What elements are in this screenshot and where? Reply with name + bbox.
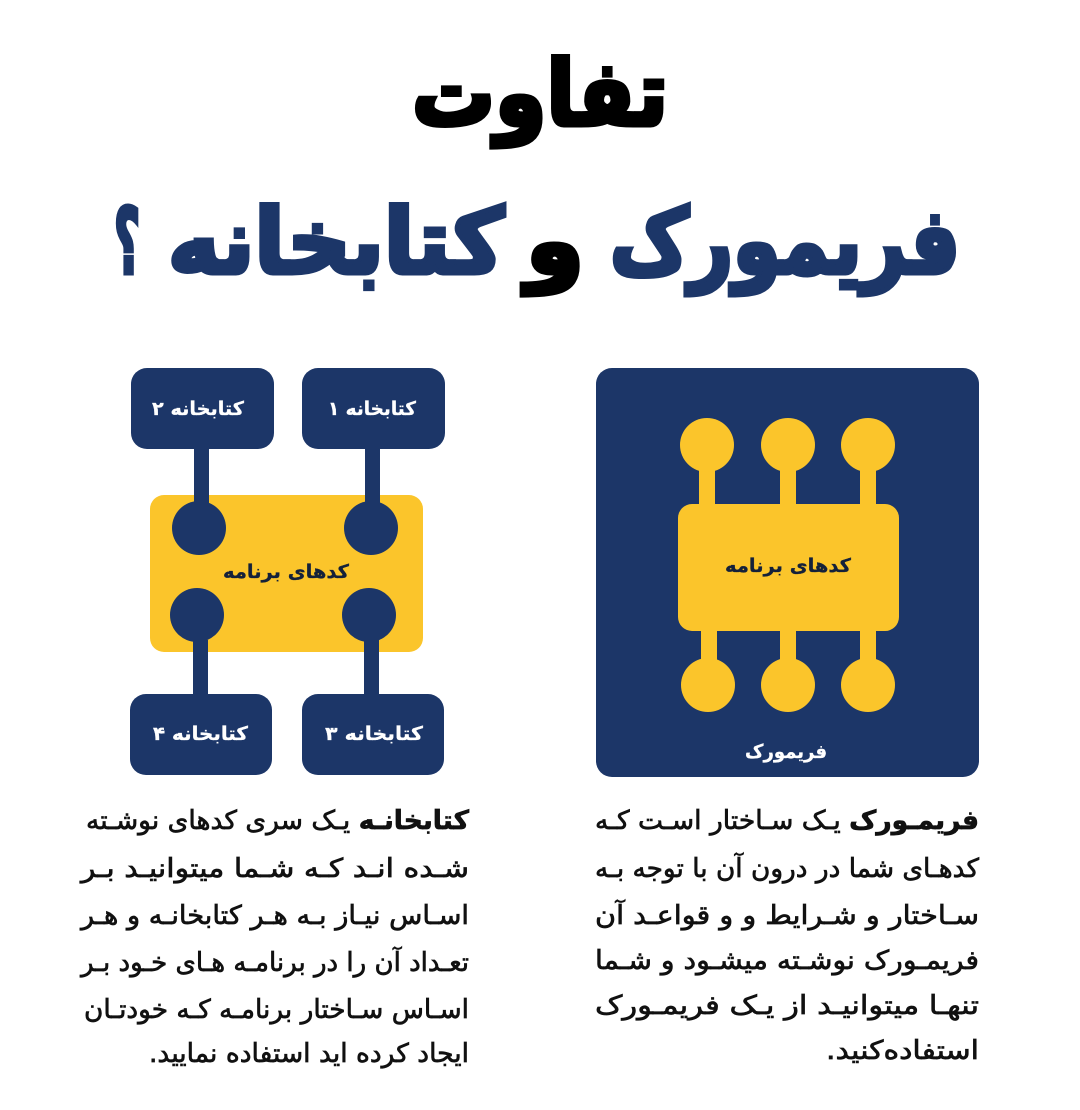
library 1 box: کتابخانه ۱ (328, 398, 417, 420)
title line 2: ؟ (114, 190, 140, 295)
panel: library diagram (130, 368, 445, 775)
text block: framework description: تنهـا میتوانیـد از یـک فریمـورک (595, 991, 979, 1021)
heading word: framework: فریمورک (610, 190, 960, 295)
text block: library description: اسـاس نیـاز بـه هـر کتابخانـه و هـر (79, 901, 469, 931)
connectors and nodes (680, 418, 895, 712)
program code box (150, 495, 423, 652)
text block: framework description: استفاده‌کنید. (826, 1036, 979, 1066)
text block: framework description: کدهـای شما در درون آن با توجه بـه (595, 852, 980, 884)
title line 2 (114, 190, 960, 296)
heading word: library: کتابخانه (168, 190, 505, 295)
text block: library description (79, 806, 470, 1069)
text block: library description: اسـاس سـاختار برنامـه کـه خودتـان (84, 995, 469, 1025)
text block: library description: تعـداد آن را در برنامـه هـای خـود بـر (79, 946, 469, 978)
label: framework: فریمورک (745, 741, 827, 763)
label: program code: کدهای برنامه (725, 555, 852, 577)
text block: library description: ایجاد کرده اید استفاده نمایید. (149, 1039, 469, 1069)
text block: framework description: فریمـورک یـک سـاختار اسـت کـه (595, 806, 979, 836)
library 4 box: کتابخانه ۴ (153, 723, 249, 745)
library 3 box: کتابخانه ۳ (325, 723, 424, 745)
connectors (170, 440, 398, 700)
heading word: and: و (522, 190, 584, 296)
library 1 box (302, 368, 445, 449)
text block: framework description: فریمـورک نوشـته میشـود و شـما (595, 946, 979, 976)
library 4 box (130, 694, 272, 775)
text block: framework description (595, 806, 980, 1066)
library 3 box (302, 694, 444, 775)
label: program code: کدهای برنامه (223, 561, 350, 583)
library 2 box: کتابخانه ۲ (152, 398, 245, 420)
text block: framework description: سـاختار و شـرایط و و قواعـد آن (595, 899, 979, 931)
panel: framework diagram (596, 368, 979, 777)
library 2 box (131, 368, 274, 449)
program code box (678, 504, 899, 631)
text block: library description: کتابخانـه یـک سری کدهای نوشـته (86, 806, 470, 836)
title line 1: تفاوت (412, 42, 668, 148)
text block: library description: شـده انـد کـه شـما میتوانیـد بـر (79, 854, 469, 884)
